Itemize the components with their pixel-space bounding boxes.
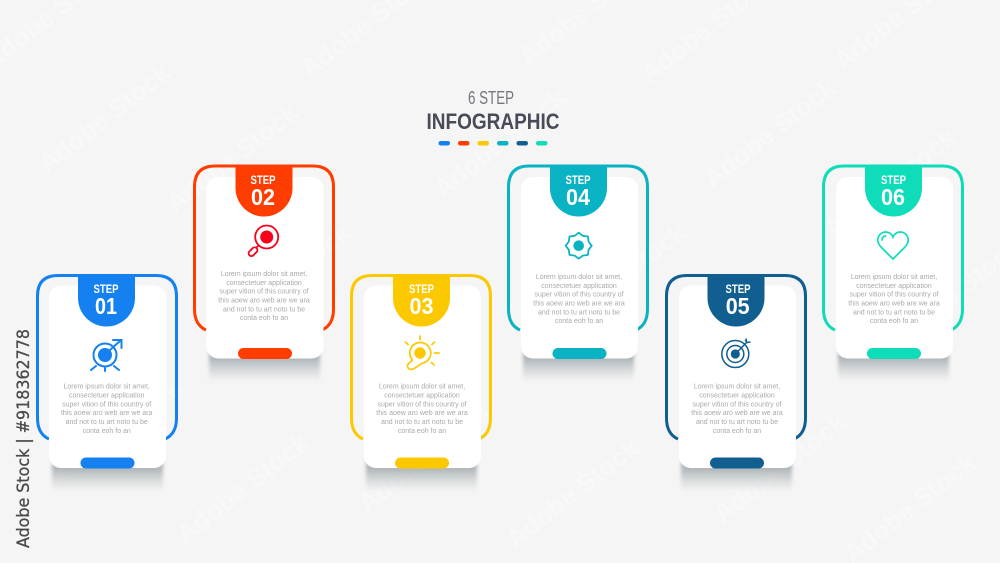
title: 6 step: 6 STEP bbox=[468, 88, 514, 108]
icon: gear flower bbox=[566, 233, 592, 259]
panel: step 04 bbox=[508, 165, 648, 382]
icon: bullseye with arrow bbox=[722, 338, 750, 368]
text block: super vition of this country of bbox=[534, 292, 624, 299]
panel: step 02 bbox=[194, 165, 334, 382]
text block: conta eoh fo an bbox=[83, 428, 131, 435]
panel: step 04: 04 bbox=[566, 184, 590, 210]
icon: target with arrow bbox=[91, 340, 122, 371]
text block: consectetuer application bbox=[226, 280, 302, 287]
pill bbox=[80, 458, 134, 468]
text: Adobe Stock bbox=[698, 72, 842, 194]
text block: conta eoh fo an bbox=[713, 428, 761, 435]
panel: step 02: 02 bbox=[251, 184, 275, 210]
text block: Lorem ipsum dolor sit amet, bbox=[851, 274, 937, 281]
text: Adobe Stock bbox=[428, 82, 572, 204]
text block: Lorem ipsum dolor sit amet, bbox=[694, 384, 780, 390]
panel: step 03: 03 bbox=[410, 293, 434, 319]
colour dash row bbox=[438, 141, 548, 146]
text block: and not to tu art noto tu be bbox=[381, 419, 463, 426]
text block: and not to tu art noto tu be bbox=[538, 309, 620, 316]
text block: super vition of this country of bbox=[62, 401, 151, 408]
panel: step 03: STEP bbox=[409, 282, 434, 296]
panel: step 04: STEP bbox=[566, 173, 590, 187]
text block: conta eoh fo an bbox=[870, 318, 918, 325]
panel: step 03 bbox=[352, 275, 490, 492]
text block: and not to tu art noto tu be bbox=[853, 309, 935, 316]
panel: step 01: 01 bbox=[95, 293, 117, 319]
text: Adobe Stock bbox=[501, 432, 645, 554]
panel: step 01 bbox=[38, 275, 176, 492]
text block: super vition of this country of bbox=[692, 401, 782, 408]
panel: step 06 bbox=[824, 165, 962, 382]
text block: this aoew aro web are we ara bbox=[376, 410, 468, 417]
stock id text: Adobe Stock | #918362778 bbox=[14, 329, 34, 548]
panel: step 05: STEP bbox=[726, 282, 750, 296]
panel: step 01: STEP bbox=[94, 282, 118, 296]
text: Adobe Stock bbox=[33, 57, 177, 179]
text: Adobe Stock bbox=[548, 217, 692, 339]
text block: this aoew aro web are we ara bbox=[61, 410, 153, 417]
text block: this aoew aro web are we ara bbox=[848, 300, 940, 307]
text block: conta eoh fo an bbox=[398, 428, 446, 435]
text: Adobe Stock bbox=[708, 407, 852, 529]
text block: consectetuer application bbox=[699, 392, 775, 400]
icon: heart bbox=[878, 232, 908, 259]
icon: light bulb bbox=[406, 336, 439, 369]
text: Adobe Stock bbox=[161, 97, 305, 219]
text: Adobe Stock bbox=[353, 397, 497, 519]
text block: consectetuer application bbox=[69, 392, 145, 400]
text: Adobe Stock bbox=[171, 427, 315, 549]
panel: step 05 bbox=[666, 275, 806, 492]
text block: and not to tu art noto tu be bbox=[223, 306, 305, 313]
text block bbox=[61, 384, 153, 435]
text block: and not to tu art noto tu be bbox=[696, 419, 778, 426]
text block: consectetuer application bbox=[856, 283, 932, 290]
pill bbox=[395, 458, 449, 468]
text block: this aoew aro web are we ara bbox=[691, 410, 783, 417]
text block bbox=[848, 274, 940, 325]
pill bbox=[710, 458, 764, 468]
text block: conta eoh fo an bbox=[240, 315, 288, 322]
text: Adobe Stock bbox=[213, 217, 357, 339]
panel: step 02: STEP bbox=[250, 173, 276, 187]
text block: Lorem ipsum dolor sit amet, bbox=[379, 384, 465, 390]
text block: super vition of this country of bbox=[219, 289, 309, 296]
pill bbox=[238, 348, 292, 359]
text block: this aoew aro web are we ara bbox=[218, 297, 310, 304]
text block: and not to tu art noto tu be bbox=[66, 419, 148, 426]
text block bbox=[691, 384, 783, 435]
panel: step 05: 05 bbox=[726, 293, 750, 319]
text block: Lorem ipsum dolor sit amet, bbox=[64, 384, 150, 390]
icon: magnifier bbox=[248, 226, 278, 257]
pill bbox=[867, 348, 921, 359]
text block: Lorem ipsum dolor sit amet, bbox=[536, 274, 622, 281]
text block bbox=[376, 384, 468, 435]
text block bbox=[218, 271, 310, 322]
text block bbox=[533, 274, 625, 325]
text block: this aoew aro web are we ara bbox=[533, 300, 625, 307]
pill bbox=[552, 348, 606, 359]
text block: super vition of this country of bbox=[849, 292, 939, 299]
text block: Lorem ipsum dolor sit amet, bbox=[221, 271, 307, 278]
text: Adobe Stock bbox=[43, 372, 187, 494]
text block: conta eoh fo an bbox=[555, 318, 603, 325]
text: Adobe Stock bbox=[818, 122, 962, 244]
text block: consectetuer application bbox=[384, 392, 460, 400]
text block: consectetuer application bbox=[541, 283, 617, 290]
text block: super vition of this country of bbox=[377, 401, 467, 408]
panel: step 06: STEP bbox=[881, 173, 906, 187]
panel: step 06: 06 bbox=[881, 184, 905, 210]
title: infographic: INFOGRAPHIC bbox=[426, 109, 560, 134]
